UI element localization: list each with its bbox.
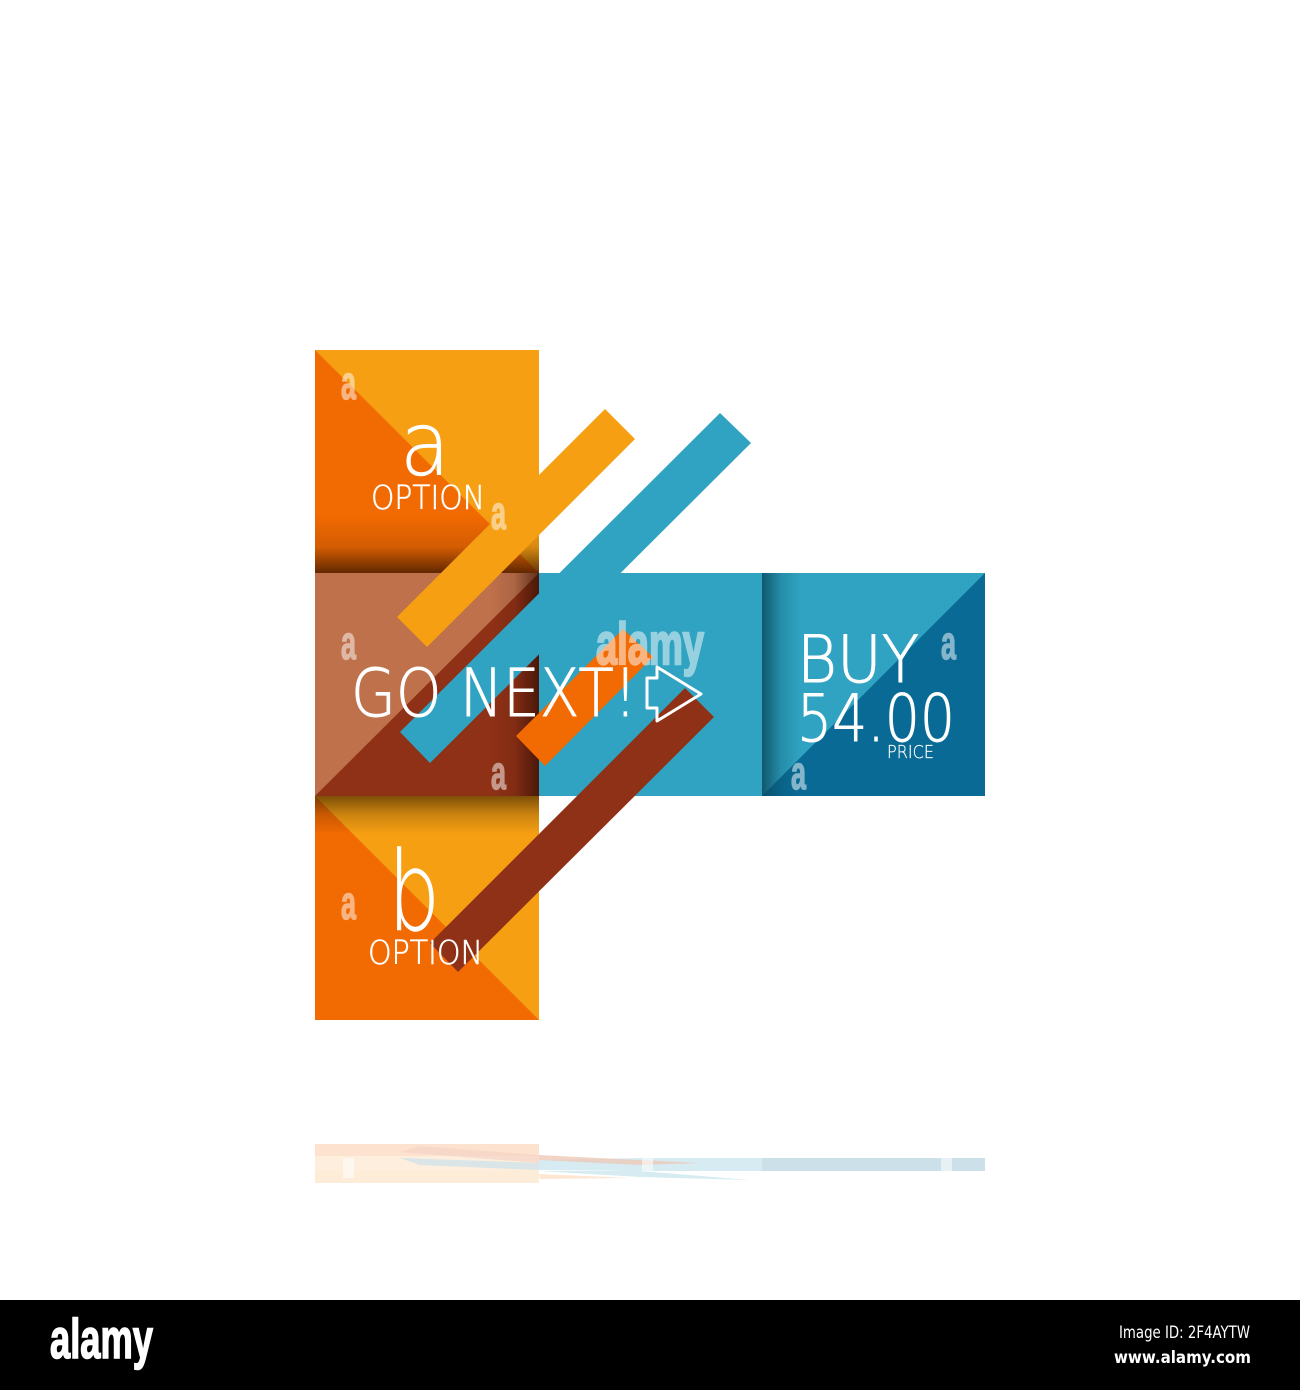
reflection xyxy=(315,1144,985,1183)
watermark letters: a xyxy=(341,616,356,669)
option b label: OPTION xyxy=(368,933,483,972)
panel: bottom orange square xyxy=(315,796,539,1020)
panel: dark blue price square xyxy=(762,573,985,796)
watermark letters xyxy=(341,356,956,929)
panel: blue rectangle xyxy=(539,573,762,796)
diagonal strip: blue xyxy=(400,413,751,763)
watermark letters: a xyxy=(941,616,956,669)
watermark: alamy logo: alamy xyxy=(596,612,704,677)
diagonal strip: brown xyxy=(430,688,714,972)
buy text: BUY xyxy=(797,623,919,698)
option a label: OPTION xyxy=(371,478,485,517)
option a letter: a xyxy=(400,393,450,496)
panel: top orange square xyxy=(315,350,539,573)
icon: outline arrow xyxy=(647,667,701,721)
watermark letters: a xyxy=(341,356,356,409)
footer url: www.alamy.com xyxy=(1114,1348,1251,1368)
watermark letters: a xyxy=(341,876,356,929)
watermark letters: a xyxy=(791,746,806,799)
panel: middle brown square xyxy=(315,573,539,796)
go next text: GO NEXT! xyxy=(351,655,637,732)
option b letter: b xyxy=(388,828,440,956)
diagonal strip: light orange xyxy=(397,409,635,647)
watermark letters: a xyxy=(491,486,506,539)
footer image id: Image ID: 2F4AYTW xyxy=(1119,1323,1250,1343)
price value: 54.00 xyxy=(797,682,955,757)
watermark letters: a xyxy=(491,746,506,799)
diagonal strip: dark orange xyxy=(516,629,653,766)
footer logo: alamy xyxy=(50,1307,153,1370)
footer bar xyxy=(0,1300,1300,1390)
price label: PRICE xyxy=(887,742,934,763)
